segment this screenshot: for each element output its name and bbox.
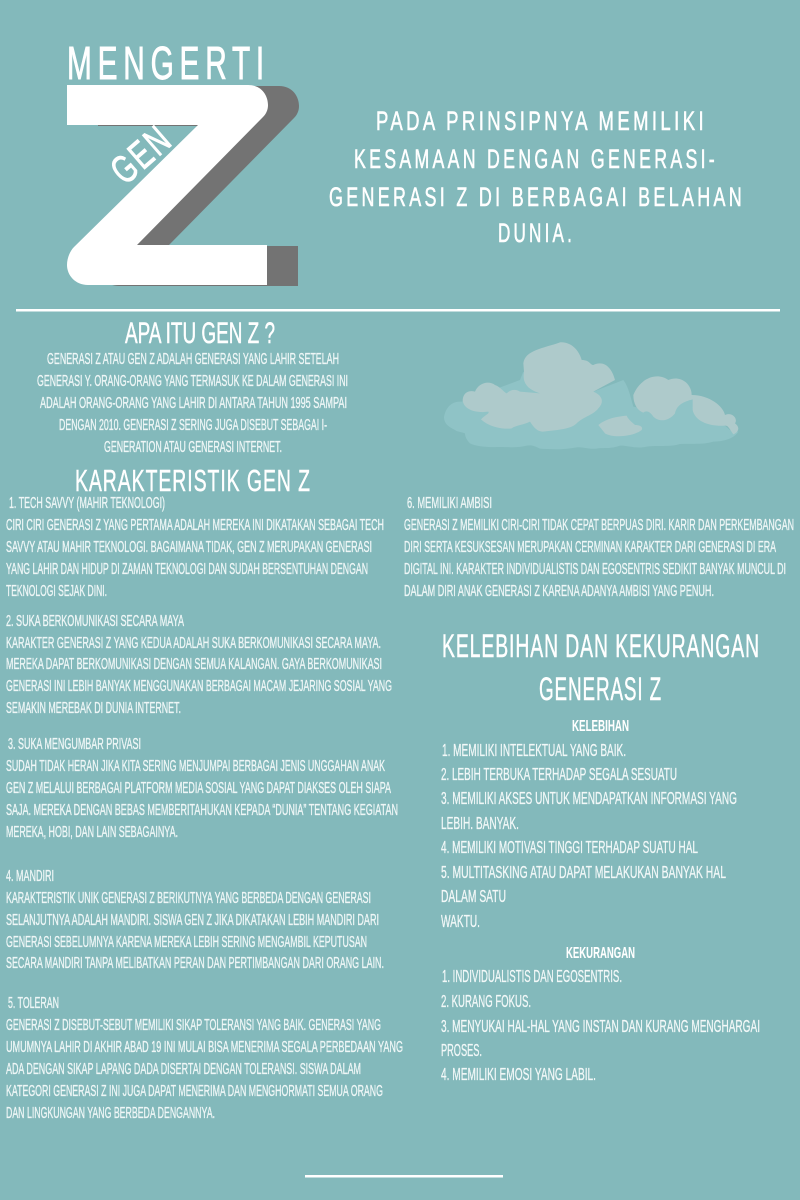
icon: cloud (444, 342, 738, 449)
intro statement (329, 106, 745, 248)
text block: definition of Gen Z: DENGAN 2010. GENERASI Z SERING JUGA DISEBUT SEBAGAI I- (59, 417, 327, 434)
characteristic 5: toleran: GENERASI Z DISEBUT-SEBUT MEMILIKI SIKAP TOLERANSI YANG BAIK. GENERASI YANG (6, 1017, 381, 1034)
title word: Mengerti: MENGERTI (67, 37, 270, 89)
characteristic 3: suka mengumbar privasi: SUDAH TIDAK HERAN JIKA KITA SERING MENJUMPAI BERBAGAI JENIS UNGGAHAN ANAK (6, 758, 385, 775)
characteristic 5: toleran: UMUMNYA LAHIR DI AKHIR ABAD 19 INI MULAI BISA MENERIMA SEGALA PERBEDAAN YANG (6, 1039, 403, 1056)
characteristic 6: memiliki ambisi: 6. MEMILIKI AMBISI (407, 495, 492, 512)
characteristic 2: suka berkomunikasi: GENERASI INI LEBIH BANYAK MENGGUNAKAN BERBAGAI MACAM JEJARING SOSIAL YANG (6, 678, 392, 695)
list: kelebihan: WAKTU. (441, 911, 480, 931)
characteristic 4: mandiri (6, 868, 384, 972)
heading: Kelebihan dan Kekurangan (442, 628, 760, 707)
heading: Kelebihan dan Kekurangan: GENERASI Z (539, 671, 662, 707)
characteristic 3: suka mengumbar privasi (6, 736, 398, 841)
characteristic 1: tech savvy: SAVVY ATAU MAHIR TEKNOLOGI. BAGAIMANA TIDAK, GEN Z MERUPAKAN GENERASI (6, 539, 372, 556)
list: kekurangan (441, 945, 760, 1084)
letter Z shadow (98, 86, 299, 286)
list: kekurangan: PROSES. (441, 1040, 482, 1060)
characteristic 2: suka berkomunikasi (6, 613, 392, 717)
characteristic 5: toleran: DAN LINGKUNGAN YANG BERBEDA DENGANNYA. (6, 1105, 215, 1122)
characteristic 1: tech savvy: YANG LAHIR DAN HIDUP DI ZAMAN TEKNOLOGI DAN SUDAH BERSENTUHAN DENGAN (6, 561, 368, 578)
text block: definition of Gen Z: GENERATION ATAU GENERASI INTERNET. (104, 439, 282, 456)
title logo: Mengerti Gen Z (67, 37, 299, 286)
text block: definition of Gen Z (37, 351, 348, 456)
rotated word: Gen: GEN (103, 117, 181, 193)
characteristic 6: memiliki ambisi (404, 495, 794, 600)
characteristic 3: suka mengumbar privasi: GEN Z MELALUI BERBAGAI PLATFORM MEDIA SOSIAL YANG DAPAT DIAKSES OLEH SIAPA (6, 780, 391, 797)
list: kelebihan: 1. MEMILIKI INTELEKTUAL YANG BAIK. (442, 740, 626, 760)
characteristic 3: suka mengumbar privasi: SAJA. MEREKA DENGAN BEBAS MEMBERITAHUKAN KEPADA “DUNIA” TENTANG KEGIATAN (6, 802, 398, 819)
text block: definition of Gen Z: GENERASI Y. ORANG-ORANG YANG TERMASUK KE DALAM GENERASI INI (37, 373, 348, 390)
characteristic 5: toleran (6, 995, 403, 1122)
characteristic 4: mandiri: GENERASI SEBELUMNYA KARENA MEREKA LEBIH SERING MENGAMBIL KEPUTUSAN (6, 934, 367, 951)
characteristic 2: suka berkomunikasi: SEMAKIN MEREBAK DI DUNIA INTERNET. (6, 700, 181, 717)
characteristic 2: suka berkomunikasi: KARAKTER GENERASI Z YANG KEDUA ADALAH SUKA BERKOMUNIKASI SECARA MAYA. (6, 635, 381, 652)
characteristic 4: mandiri: SECARA MANDIRI TANPA MELIBATKAN PERAN DAN PERTIMBANGAN DARI ORANG LAIN. (6, 955, 384, 972)
characteristic 1: tech savvy (6, 495, 384, 600)
list: kekurangan: 2. KURANG FOKUS. (441, 991, 531, 1011)
list: kelebihan (441, 718, 737, 931)
characteristic 5: toleran: KATEGORI GENERASI Z INI JUGA DAPAT MENERIMA DAN MENGHORMATI SEMUA ORANG (6, 1083, 383, 1100)
characteristic 4: mandiri: SELANJUTNYA ADALAH MANDIRI. SISWA GEN Z JIKA DIKATAKAN LEBIH MANDIRI DARI (6, 912, 379, 929)
characteristic 5: toleran: 5. TOLERAN (8, 995, 59, 1012)
list: kelebihan: DALAM SATU (441, 886, 506, 906)
letter Z (67, 85, 268, 285)
list: kelebihan: KELEBIHAN (572, 718, 629, 735)
list: kelebihan: LEBIH. BANYAK. (441, 813, 519, 833)
list: kekurangan: 1. INDIVIDUALISTIS DAN EGOSENTRIS. (442, 966, 622, 986)
characteristic 3: suka mengumbar privasi: MEREKA, HOBI, DAN LAIN SEBAGAINYA. (6, 824, 178, 841)
characteristic 4: mandiri: 4. MANDIRI (6, 868, 54, 885)
text block: definition of Gen Z: ADALAH ORANG-ORANG YANG LAHIR DI ANTARA TAHUN 1995 SAMPAI (40, 395, 347, 412)
list: kekurangan: KEKURANGAN (566, 945, 635, 962)
characteristic 3: suka mengumbar privasi: 3. SUKA MENGUMBAR PRIVASI (8, 736, 141, 753)
characteristic 2: suka berkomunikasi: MEREKA DAPAT BERKOMUNIKASI DENGAN SEMUA KALANGAN. GAYA BERKOMUNIKASI (6, 656, 382, 673)
list: kekurangan: 4. MEMILIKI EMOSI YANG LABIL. (441, 1064, 596, 1084)
heading: Karakteristik Gen Z: KARAKTERISTIK GEN Z (75, 463, 311, 498)
characteristic 4: mandiri: KARAKTERISTIK UNIK GENERASI Z BERIKUTNYA YANG BERBEDA DENGAN GENERASI (6, 890, 371, 907)
characteristic 1: tech savvy: CIRI CIRI GENERASI Z YANG PERTAMA ADALAH MEREKA INI DIKATAKAN SEBAGAI TECH (6, 517, 384, 534)
characteristic 1: tech savvy: TEKNOLOGI SEJAK DINI. (6, 583, 107, 600)
characteristic 5: toleran: ADA DENGAN SIKAP LAPANG DADA DISERTAI DENGAN TOLERANSI. SISWA DALAM (6, 1061, 361, 1078)
intro statement: DUNIA. (498, 218, 575, 248)
heading: Apa itu Gen Z: APA ITU GEN Z ? (125, 317, 275, 350)
text block: definition of Gen Z: GENERASI Z ATAU GEN Z ADALAH GENERASI YANG LAHIR SETELAH (47, 351, 339, 368)
characteristic 1: tech savvy: 1. TECH SAVVY (MAHIR TEKNOLOGI) (9, 495, 165, 512)
characteristic 2: suka berkomunikasi: 2. SUKA BERKOMUNIKASI SECARA MAYA (6, 613, 184, 630)
